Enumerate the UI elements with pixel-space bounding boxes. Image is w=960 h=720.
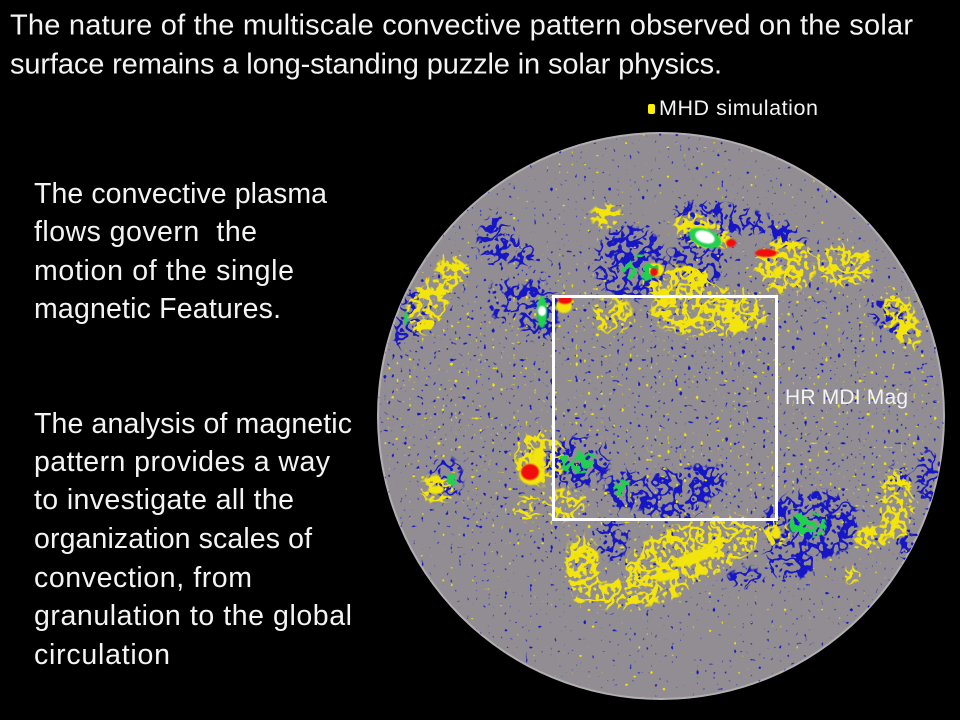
solid yellow cores [428,223,783,584]
text block: analysis of magnetic pattern [34,408,352,671]
text block: analysis of magnetic pattern: organization scales of [34,523,312,555]
text block: convective plasma flows [34,178,327,325]
solar magnetogram disc [370,128,945,700]
title: The nature of the multiscale convective pattern observed on the solar [10,10,913,42]
white box: high resolution field of view [554,296,776,520]
red and white strong field cores [521,228,777,480]
text block: convective plasma flows: The convective plasma [34,178,327,210]
text block: convective plasma flows: flows govern the [34,216,257,248]
blue magnetic network [370,128,941,588]
green cores [446,254,827,539]
yellow magnetic network [370,128,941,616]
text block: analysis of magnetic pattern: to investigate all the [34,484,294,516]
text block: analysis of magnetic pattern: pattern provides a way [34,446,331,478]
text block: analysis of magnetic pattern: The analysis of magnetic [34,408,352,440]
text block: analysis of magnetic pattern: convection, from [34,562,252,594]
text block: analysis of magnetic pattern: granulation to the global [34,600,352,632]
text block: convective plasma flows: magnetic Features. [34,293,281,325]
title [10,10,913,80]
text block: convective plasma flows: motion of the single [34,255,294,287]
label: HR MDI Mag: HR MDI Mag [785,386,908,409]
legend: MHD simulation: MHD simulation [659,96,818,120]
title: surface remains a long-standing puzzle in solar physics. [10,48,722,80]
text block: analysis of magnetic pattern: circulation [34,639,170,671]
